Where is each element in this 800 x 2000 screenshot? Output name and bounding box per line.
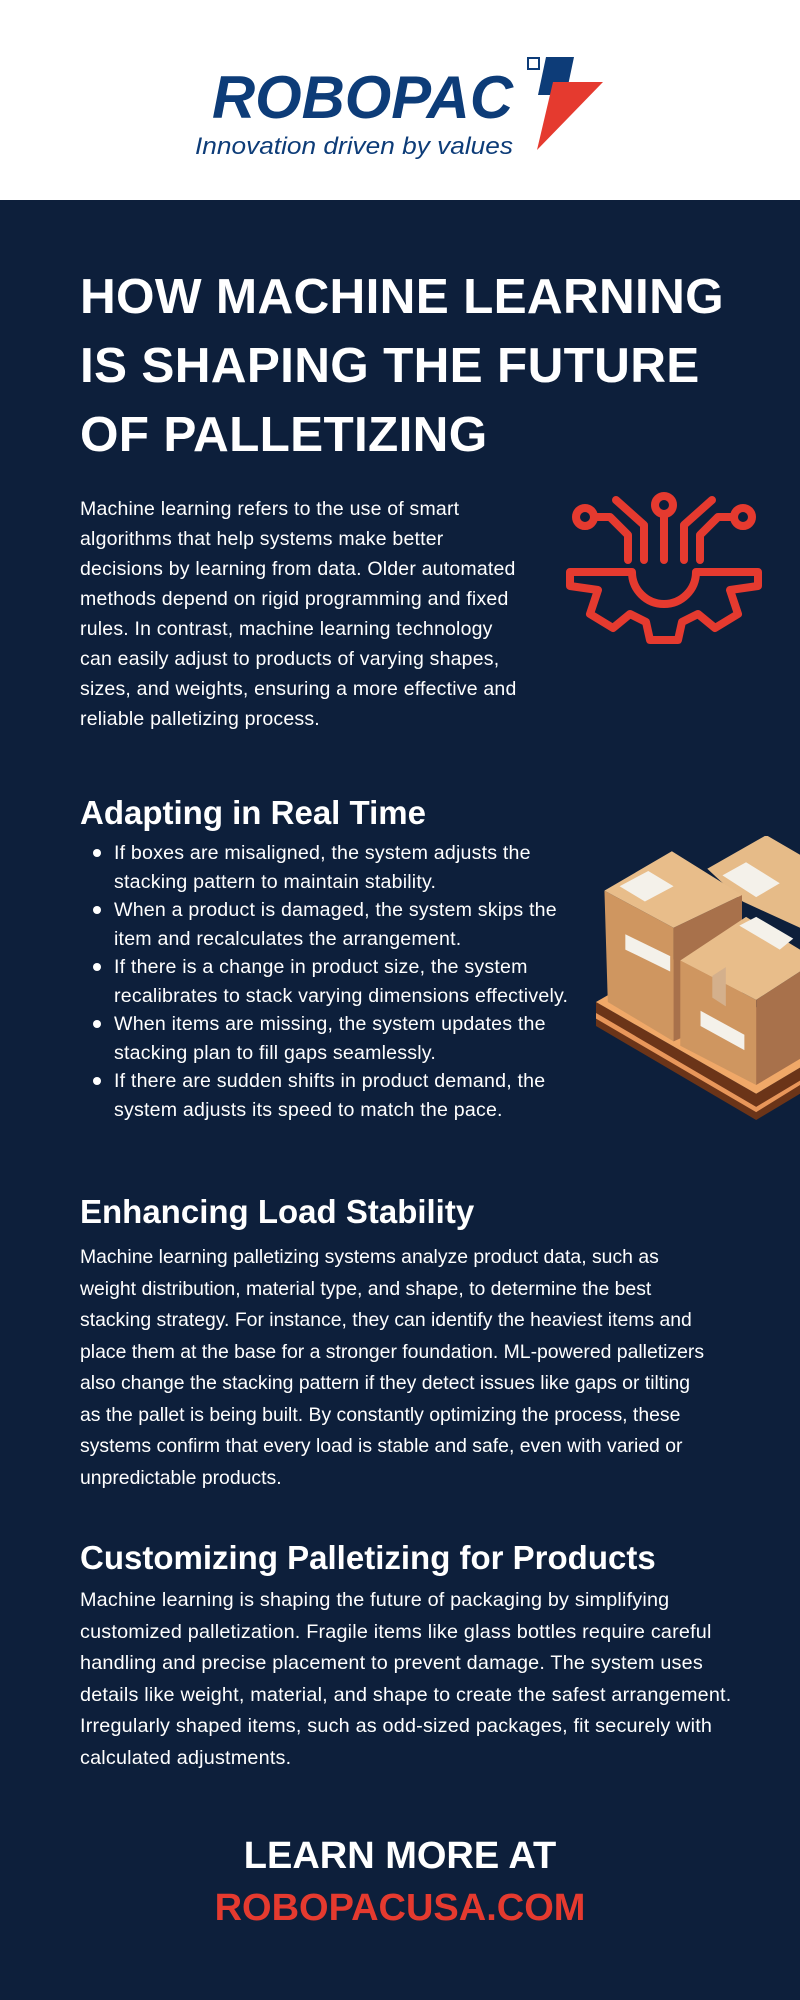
logo — [195, 57, 603, 160]
illustration: boxes on pallet — [596, 836, 800, 1120]
call to action: ROBOPACUSA.COM — [215, 1887, 585, 1929]
heading: Enhancing Load Stability: Enhancing Load Stability — [80, 1193, 474, 1230]
call to action — [215, 1835, 585, 1929]
bullet list: When a product is damaged, the system skips the item and recalculates the arrangement. — [114, 899, 557, 950]
bullet list — [93, 842, 568, 1120]
logo: Innovation driven by values — [195, 133, 513, 160]
heading: Adapting in Real Time: Adapting in Real Time — [80, 794, 426, 831]
call to action: LEARN MORE AT — [244, 1835, 556, 1877]
bullet list: If boxes are misaligned, the system adjusts the stacking pattern to maintain stability. — [114, 842, 531, 892]
header: white logo band — [0, 0, 800, 200]
heading: Customizing Palletizing for Products: Customizing Palletizing for Products — [80, 1539, 656, 1576]
title: HOW MACHINE LEARNING IS SHAPING THE FUTURE OF PALLETIZING — [80, 269, 724, 462]
bullet list: If there is a change in product size, the system recalibrates to stack varying dimensions effectively. — [114, 956, 568, 1006]
paragraph: customizing: Machine learning is shaping the future of packaging by simplifying customized palletization. Fragile items like glass bottles require careful handling and precise placement to prevent damage. The system uses details like weight, material, and shape to create the safest arrangement. Irregularly shaped items, such as odd-sized packages, fit securely with calculated adjustments. — [80, 1589, 731, 1768]
bullet list: When items are missing, the system updates the stacking plan to fill gaps seamlessly. — [114, 1013, 546, 1064]
icon: gear with circuit lines — [566, 492, 762, 644]
bullet list: If there are sudden shifts in product demand, the system adjusts its speed to match the pace. — [114, 1070, 545, 1120]
paragraph: load stability: Machine learning palletizing systems analyze product data, such as weight distribution, material type, and shape, to determine the best stacking strategy. For instance, they can identify the heaviest items and place them at the base for a stronger foundation. ML-powered palletizers also change the stacking pattern if they detect issues like gaps or tilting as the pallet is being built. By constantly optimizing the process, these systems confirm that every load is stable and safe, even with varied or unpredictable products. — [80, 1246, 704, 1488]
intro text: Machine learning refers to the use of smart algorithms that help systems make better decisions by learning from data. Older automated methods depend on rigid programming and fixed rules. In contrast, machine learning technology can easily adjust to products of varying shapes, sizes, and weights, ensuring a more effective and reliable palletizing process. — [80, 498, 517, 730]
logo: ROBOPAC — [212, 64, 515, 131]
